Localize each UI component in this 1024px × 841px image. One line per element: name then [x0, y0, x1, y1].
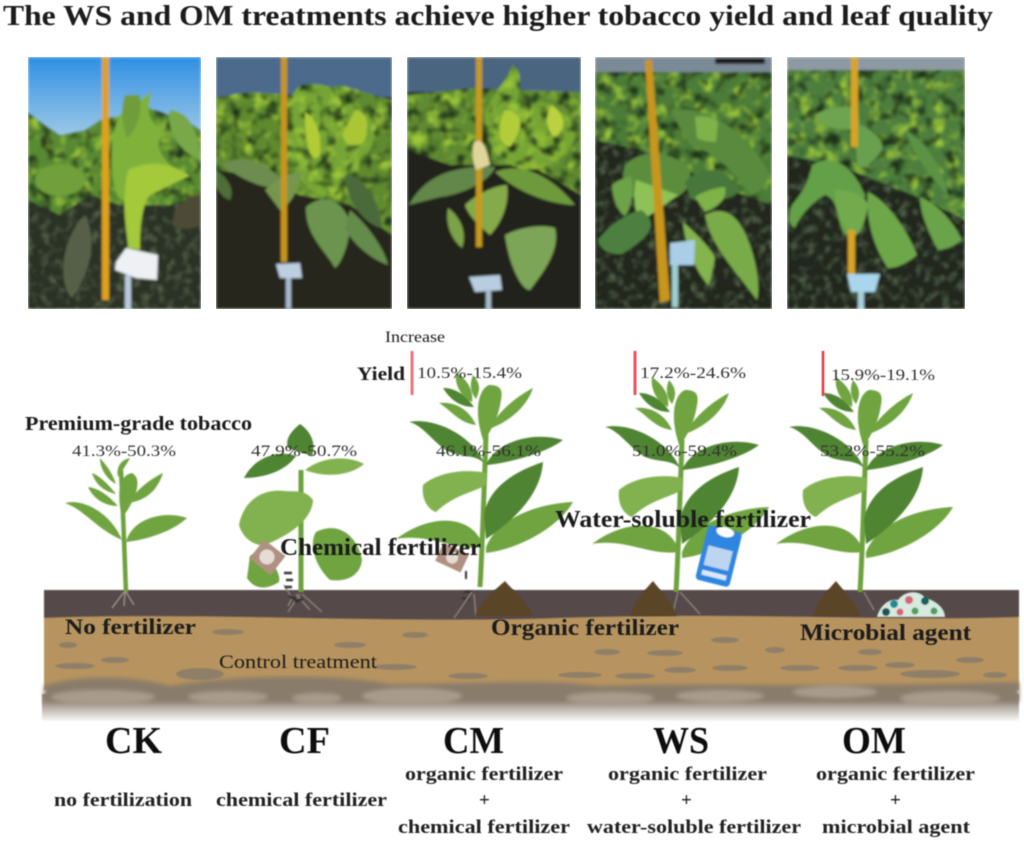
code: WS: WS: [653, 720, 709, 762]
premium-grade tobacco annotations: [25, 414, 925, 460]
icon: organic fertilizer mounds: [475, 581, 860, 616]
description: CM: +: [479, 790, 490, 811]
description: WS: water-soluble fertilizer: [587, 817, 802, 838]
plant: CF: [239, 424, 364, 612]
description: CK: no fertilization: [54, 790, 192, 811]
plant: CM: [396, 372, 573, 587]
description: OM: [816, 764, 976, 838]
arrow: CM yield: [410, 351, 414, 395]
value: OM yield: 15.9%-19.1%: [831, 367, 935, 384]
code: CF: CF: [279, 720, 330, 762]
code: CK: CK: [105, 720, 162, 762]
value: WS: 51.0%-59.4%: [632, 443, 737, 460]
value: CM yield: 10.5%-15.4%: [417, 365, 522, 382]
yield label: Yield: [357, 365, 406, 385]
treatment input labels: [65, 507, 971, 673]
description: CM: chemical fertilizer: [398, 817, 571, 838]
description: OM: microbial agent: [822, 817, 971, 838]
photo: WS plant: [595, 57, 772, 309]
photo: CF plant: [216, 57, 392, 309]
description: CF: chemical fertilizer: [216, 790, 388, 811]
plant: OM: [776, 377, 953, 592]
label: microbial agent: Microbial agent: [800, 620, 971, 645]
value: CK: 41.3%-50.3%: [72, 443, 176, 460]
arrow: OM yield: [822, 351, 824, 396]
description: OM: organic fertilizer: [816, 764, 976, 785]
label: control treatment: Control treatment: [219, 652, 378, 673]
label: chemical fertilizer: Chemical fertilizer: [280, 535, 481, 561]
value: CM: 46.1%-56.1%: [436, 443, 541, 460]
treatment descriptions: [54, 764, 976, 838]
value: OM: 53.2%-55.2%: [820, 443, 925, 460]
value: CF: 47.9%-50.7%: [251, 443, 357, 460]
description: WS: [587, 764, 802, 838]
description: OM: +: [890, 790, 901, 811]
yield annotations: [357, 329, 935, 396]
label: organic fertilizer: Organic fertilizer: [491, 615, 679, 640]
increase label: Increase: [385, 329, 445, 346]
icons: chemical fertilizer bags: [249, 540, 874, 618]
code: OM: OM: [842, 720, 906, 762]
icon: microbial agent pile: [877, 592, 945, 617]
description: WS: organic fertilizer: [608, 764, 768, 785]
photo: OM plant: [787, 57, 965, 309]
plant: CK: [65, 458, 187, 608]
description: WS: +: [681, 790, 692, 811]
description: CM: organic fertilizer: [405, 764, 564, 785]
value: WS yield: 17.2%-24.6%: [640, 365, 746, 382]
premium label: Premium-grade tobacco: [25, 414, 252, 435]
label: water-soluble fertilizer: Water-soluble fertilizer: [555, 507, 811, 533]
photo: CK plant: [28, 57, 201, 311]
arrow: WS yield: [634, 351, 636, 395]
icon: water-soluble fertilizer bag: [695, 523, 743, 588]
soil cross-section: [42, 590, 1019, 722]
description: CM: [398, 764, 571, 838]
plant: WS: [592, 377, 769, 592]
label: no fertilizer: No fertilizer: [65, 614, 196, 639]
photo: CM plant: [407, 57, 581, 310]
treatment codes: [105, 720, 906, 762]
title: The WS and OM treatments achieve higher tobacco yield and leaf quality: [3, 1, 993, 32]
code: CM: CM: [443, 720, 504, 762]
